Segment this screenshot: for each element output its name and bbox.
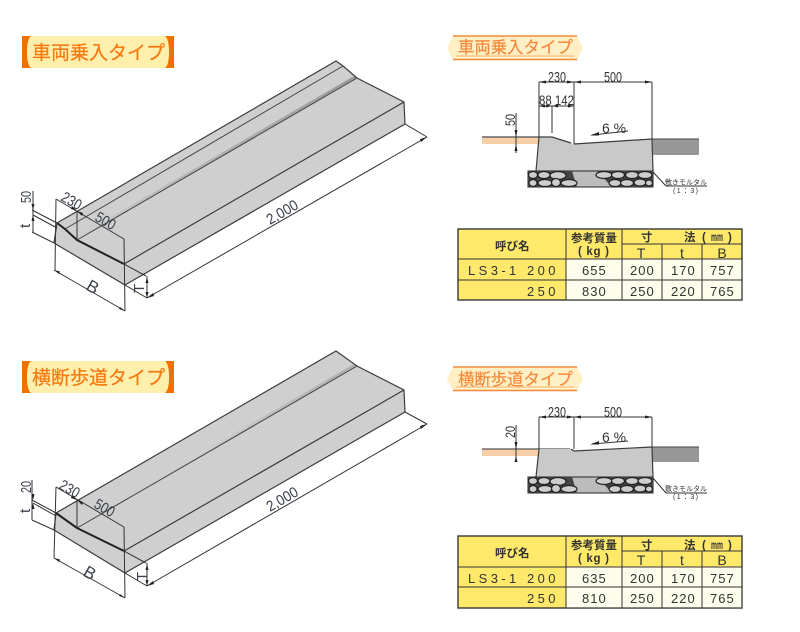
table: crosswalk dimensions: 170	[671, 571, 696, 586]
isometric drawing: vehicle entry block: 230	[58, 189, 85, 214]
section drawing: vehicle entry: 6 %	[602, 120, 626, 136]
dimension labels: 20	[18, 481, 35, 493]
table: crosswalk dimensions: (	[702, 540, 706, 552]
mortar leader	[653, 478, 707, 493]
table: crosswalk dimensions: 250	[630, 591, 655, 606]
isometric drawing: crosswalk block: 230	[56, 477, 83, 502]
foundation stones	[528, 171, 653, 187]
heading: crosswalk type (left): 横断歩道タイプ	[32, 367, 165, 389]
foundation stones	[528, 477, 653, 493]
isometric drawing: crosswalk block: t	[17, 508, 34, 513]
table: crosswalk dimensions: 参考質量	[571, 538, 617, 552]
section drawing: crosswalk	[482, 404, 707, 501]
isometric drawing: crosswalk block: T	[134, 572, 151, 581]
section drawing: vehicle entry: 500	[604, 69, 622, 86]
table: crosswalk dimensions: 810	[582, 591, 607, 606]
section drawing: crosswalk: 500	[604, 404, 622, 421]
heading: crosswalk type (right)	[447, 367, 583, 391]
table: vehicle entry dimensions: t	[680, 245, 684, 261]
section drawing: vehicle entry	[482, 69, 707, 195]
table: crosswalk dimensions: 寸	[641, 538, 652, 552]
table: vehicle entry dimensions: 寸	[641, 230, 652, 244]
isometric drawing: vehicle entry block: t	[17, 223, 34, 228]
section drawing: vehicle entry: 88 142	[539, 92, 574, 108]
table: crosswalk dimensions: mm	[711, 540, 723, 552]
isometric drawing: crosswalk block	[17, 351, 427, 598]
height dimension	[515, 425, 517, 460]
table: crosswalk dimensions: 635	[582, 571, 607, 586]
table: crosswalk dimensions: )	[728, 540, 732, 552]
table: vehicle entry dimensions: T	[637, 245, 646, 261]
isometric drawing: vehicle entry block: T	[131, 284, 148, 293]
isometric drawing: vehicle entry block	[17, 61, 427, 311]
isometric drawing: crosswalk block: B	[80, 562, 99, 584]
isometric drawing: crosswalk block: 2,000	[264, 484, 301, 515]
table: vehicle entry dimensions: ( kg )	[578, 246, 609, 258]
table: crosswalk dimensions: 250	[527, 591, 559, 606]
isometric drawing: vehicle entry block: B	[83, 276, 102, 298]
dimension lines	[54, 199, 125, 311]
dimension lines	[54, 487, 125, 598]
table: crosswalk dimensions: 法	[684, 538, 696, 552]
isometric drawing: vehicle entry block: 2,000	[264, 197, 301, 228]
heading: crosswalk type (right): 横断歩道タイプ	[458, 371, 573, 389]
section drawing: crosswalk: (1：3)	[673, 494, 698, 501]
table: vehicle entry dimensions: B	[717, 245, 727, 261]
table: crosswalk dimensions: 呼び名	[495, 546, 530, 560]
dimension labels: 50	[18, 191, 35, 203]
heading: vehicle entry type (right)	[447, 36, 583, 60]
table: vehicle entry dimensions	[458, 229, 742, 300]
table: crosswalk dimensions: 200	[630, 571, 655, 586]
table: vehicle entry dimensions: 参考質量	[571, 231, 617, 245]
section drawing: crosswalk: 敷きモルタル	[665, 484, 707, 493]
table: vehicle entry dimensions: )	[728, 232, 732, 244]
table: vehicle entry dimensions: 呼び名	[495, 239, 530, 253]
isometric drawing: vehicle entry block: 500	[92, 209, 119, 234]
section drawing: vehicle entry: 50	[502, 114, 518, 126]
table: vehicle entry dimensions: 法	[684, 230, 696, 244]
slope arrow	[592, 441, 628, 444]
table: vehicle entry dimensions: 830	[582, 284, 607, 299]
mortar leader	[653, 172, 707, 186]
table: crosswalk dimensions: ( kg )	[578, 553, 609, 565]
height dimension	[515, 113, 517, 153]
table: vehicle entry dimensions: 250	[630, 284, 655, 299]
table: crosswalk dimensions: 765	[710, 591, 735, 606]
table: crosswalk dimensions: 220	[671, 591, 696, 606]
table: vehicle entry dimensions: (	[702, 232, 706, 244]
table: crosswalk dimensions: LS3-1	[468, 571, 520, 586]
heading: vehicle entry type (left): 車両乗入タイプ	[32, 42, 165, 64]
table: vehicle entry dimensions: 250	[527, 284, 559, 299]
table: crosswalk dimensions: t	[680, 552, 684, 568]
table: vehicle entry dimensions: 655	[582, 263, 607, 278]
table: vehicle entry dimensions: 170	[671, 263, 696, 278]
table: vehicle entry dimensions: 200	[630, 263, 655, 278]
table: vehicle entry dimensions: mm	[711, 232, 723, 244]
heading: vehicle entry type (left)	[22, 36, 174, 68]
table: crosswalk dimensions: 757	[710, 571, 735, 586]
section drawing: crosswalk: 20	[502, 426, 518, 438]
heading: vehicle entry type (right): 車両乗入タイプ	[458, 39, 573, 57]
table: vehicle entry dimensions: 757	[710, 263, 735, 278]
table: crosswalk dimensions: B	[717, 552, 727, 568]
section drawing: vehicle entry: (1：3)	[673, 188, 698, 195]
table: crosswalk dimensions	[458, 536, 742, 608]
table: vehicle entry dimensions: 200	[527, 263, 559, 278]
section labels: 230	[548, 69, 566, 86]
section drawing: crosswalk: 6 %	[602, 429, 626, 445]
table: crosswalk dimensions: 200	[527, 571, 559, 586]
slope arrow	[592, 131, 628, 135]
table: crosswalk dimensions: T	[637, 552, 646, 568]
section drawing: vehicle entry: 敷きモルタル	[665, 178, 707, 186]
table: vehicle entry dimensions: LS3-1	[468, 263, 520, 278]
isometric drawing: crosswalk block: 500	[91, 496, 118, 521]
heading: crosswalk type (left)	[22, 361, 174, 393]
section labels: 230	[548, 404, 566, 421]
table: vehicle entry dimensions: 220	[671, 284, 696, 299]
table: vehicle entry dimensions: 765	[710, 284, 735, 299]
